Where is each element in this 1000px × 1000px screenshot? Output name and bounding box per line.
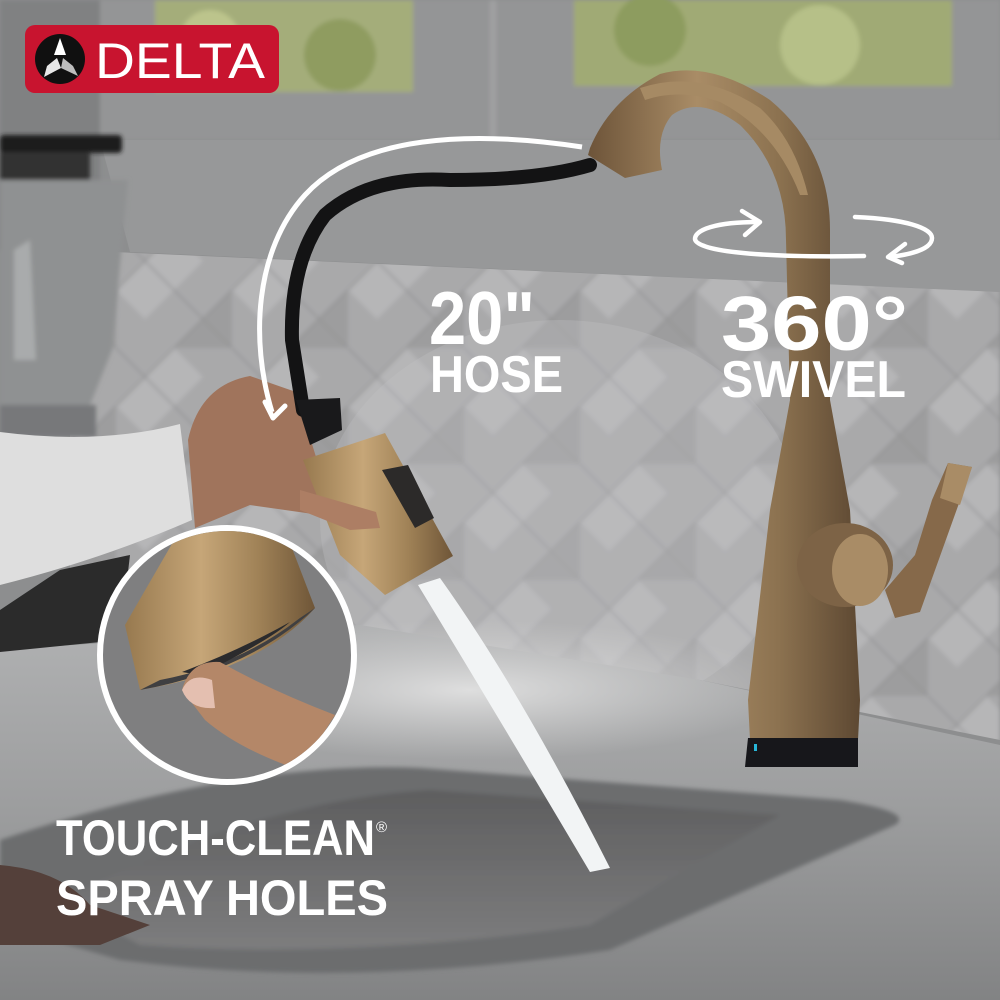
black pull-down hose (292, 165, 590, 410)
Delta logo badge (25, 25, 279, 93)
faucet neck and spout (588, 70, 860, 740)
hand holding sprayer (188, 376, 378, 530)
heading: 360 degree swivel: SWIVEL (721, 351, 906, 409)
heading: 360 degree swivel (721, 281, 908, 409)
heading: 20 inch hose: HOSE (430, 346, 563, 404)
heading: 20 inch hose (429, 276, 563, 404)
Delta logo badge: DELTA (95, 33, 266, 89)
hose arrow (260, 139, 582, 418)
heading: 20 inch hose: 20" (429, 276, 535, 360)
heading: 360 degree swivel: 360° (721, 281, 908, 367)
upper wall panel (100, 140, 1000, 292)
lower left hand (0, 865, 150, 945)
sleeve (0, 424, 192, 585)
heading: touch-clean spray holes (56, 810, 388, 926)
heading: touch-clean spray holes: SPRAY HOLES (56, 870, 388, 926)
water stream (418, 578, 610, 872)
window frames (0, 0, 1000, 250)
faucet (588, 70, 972, 767)
sprayer head (296, 398, 453, 595)
heading: touch-clean spray holes: TOUCH-CLEAN (56, 810, 375, 866)
dark appliance base (0, 555, 130, 652)
heading: touch-clean spray holes: ® (376, 819, 387, 836)
handle hub (797, 523, 893, 607)
faucet base (745, 738, 858, 767)
spout highlight (640, 81, 808, 195)
360 swivel arrows (695, 211, 932, 263)
countertop (0, 625, 1000, 1000)
handle lever (885, 463, 972, 618)
inset: spray holes close-up (100, 528, 354, 782)
blender (0, 135, 128, 437)
marble herringbone backsplash (60, 240, 1000, 750)
sink basin (0, 767, 899, 973)
fingers over sprayer (300, 490, 380, 530)
